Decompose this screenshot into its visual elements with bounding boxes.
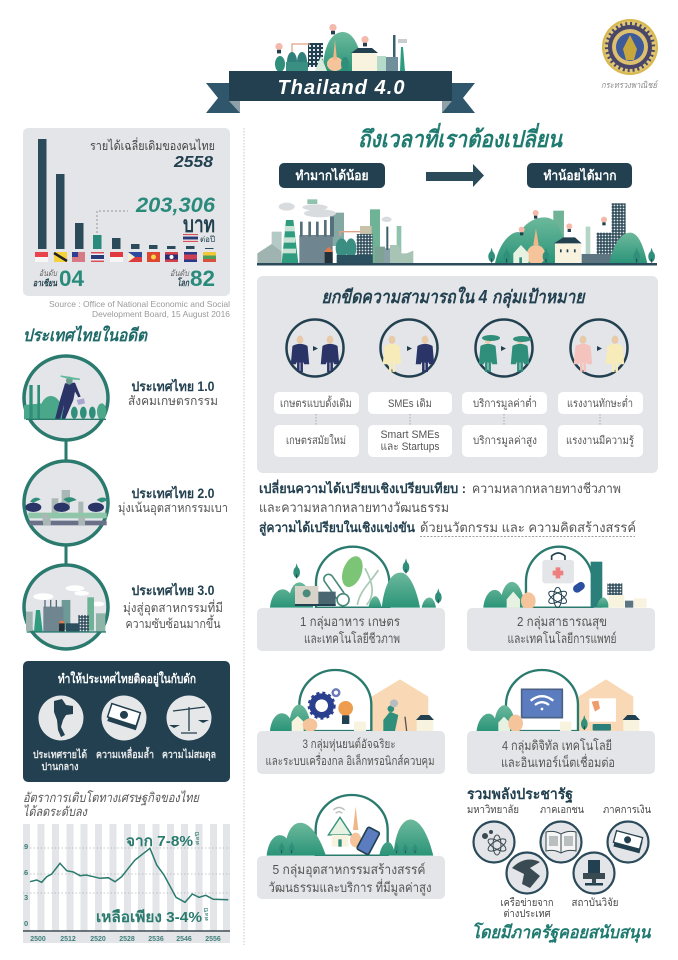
icon: private sector book — [540, 822, 582, 862]
header city illustration — [275, 24, 407, 72]
card 2 label: 2 กลุ่มสาธารณสุข — [517, 614, 607, 630]
card 5 label: 5 กลุ่มอุตสาหกรรมสร้างสรรค์ — [272, 862, 426, 878]
box: low skill labour: แรงงานทักษะต่ำ — [567, 395, 633, 410]
callout: 3-4 percent: เหลือเพียง 3-4% — [96, 909, 202, 926]
card 2 label: และเทคโนโลยีการแพทย์ — [508, 631, 616, 646]
chart heading: อัตราการเติบโตทางเศรษฐกิจของไทย — [23, 790, 200, 806]
card 5 label: วัฒนธรรมและบริการ ที่มีมูลค่าสูง — [268, 879, 432, 896]
source note: Source : Office of National Economic and Social — [49, 299, 230, 309]
label: middle income — [33, 748, 87, 773]
main heading: ถึงเวลาที่เราต้องเปลี่ยน — [358, 122, 563, 152]
box: high value services: บริการมูลค่าสูง — [473, 435, 537, 447]
card 2 illustration: health — [483, 547, 647, 610]
x axis labels: 2500 — [30, 936, 46, 943]
text: Thailand 2.0 — [118, 485, 228, 516]
world rank — [170, 266, 215, 291]
text: Thailand 1.0 — [128, 378, 218, 408]
icon: international network globe — [506, 852, 548, 894]
text: Thailand 3.0: มุ่งสู่อุตสาหกรรมที่มี — [123, 599, 223, 616]
ASEAN rank — [33, 266, 85, 291]
card 3 label — [257, 731, 445, 774]
card 4 illustration: digital — [477, 670, 640, 732]
text: comparative advantage: ความหลากหลายทางชีวภาพ — [472, 481, 621, 496]
box: modern farming — [274, 425, 359, 457]
label: inequality: ความเหลื่อมล้ำ — [96, 746, 154, 761]
unit baht: บาท — [183, 212, 215, 237]
icon: farmers — [286, 320, 344, 376]
text: Thailand 3.0: ประเทศไทย 3.0 — [132, 582, 214, 598]
card 4 label: 4 กลุ่มดิจิทัล เทคโนโลยี — [502, 738, 612, 754]
ministry seal — [601, 19, 659, 90]
labels: partners: มหาวิทยาลัย — [467, 804, 519, 816]
box: traditional SMEs: SMEs เดิม — [388, 398, 432, 410]
label: middle income: ปานกลาง — [42, 761, 78, 773]
button: do less get more: ทำน้อยได้มาก — [544, 167, 617, 183]
growth line — [30, 848, 228, 902]
ministry seal: กระทรวงพาณิชย์ — [601, 80, 659, 90]
card 3 label: 3 กลุ่มหุ่นยนต์อัจฉริยะ — [302, 737, 396, 752]
card 1 label — [257, 608, 445, 651]
box: smart SMEs: และ Startups — [380, 441, 440, 453]
button: do less get more — [527, 163, 632, 188]
panel heading: ยกขีดความสามารถใน 4 กลุ่มเป้าหมาย — [322, 286, 586, 309]
labels: partners — [467, 804, 651, 920]
chart heading — [23, 790, 200, 819]
card 4 label: และอินเทอร์เน็ตเชื่อมต่อ — [501, 753, 615, 770]
callout: 3-4 percent: ต่อปี — [203, 908, 210, 921]
icon: finance money — [608, 822, 648, 862]
text: comparative advantage: และความหลากหลายทางวัฒนธรรม — [259, 500, 449, 515]
x axis labels: 2528 — [119, 936, 135, 943]
text: Thailand 3.0 — [123, 582, 223, 631]
text: comparative advantage: เปลี่ยนความได้เปรียบเชิงเปรียบเทียบ : — [259, 479, 466, 496]
heading: civil state power: รวมพลังประชารัฐ — [467, 787, 573, 804]
world rank: 82 — [190, 266, 215, 291]
ASEAN rank: อาเซียน — [33, 278, 58, 288]
panel heading: ทำให้ประเทศไทยติดอยู่ในกับดัก — [58, 671, 196, 687]
box: traditional farming: เกษตรแบบดั้งเดิม — [280, 395, 352, 410]
ground lines — [257, 263, 657, 266]
heading: average income: รายได้เฉลี่ยเดิมของคนไทย — [90, 137, 215, 153]
button: do more get less: ทำมากได้น้อย — [296, 167, 368, 183]
panel: middle income trap — [23, 661, 230, 782]
labels: partners: สถาบันวิจัย — [572, 897, 618, 909]
panel: income — [23, 128, 230, 296]
labels: partners: เครือข่ายจาก — [500, 896, 554, 909]
illustration: new innovative city — [488, 203, 655, 265]
icon: SMEs — [380, 320, 438, 376]
thai flag and per year — [183, 234, 215, 244]
panel: four target groups — [257, 276, 658, 473]
arrow — [426, 164, 484, 187]
box: smart SMEs: Smart SMEs — [380, 429, 440, 441]
y axis labels — [24, 842, 28, 928]
ASEAN rank: 04 — [59, 266, 85, 291]
thai flag and per year: ต่อปี — [200, 235, 215, 244]
text: comparative advantage: ด้วยนวัตกรรม และ ความคิดสร้างสรรค์ — [420, 520, 636, 535]
income value: 203,306 — [135, 194, 215, 217]
callout: 7-8 percent: จาก 7-8% — [126, 833, 193, 850]
circle: Thailand 3.0 complex industry — [24, 565, 108, 649]
ASEAN rank: อันดับ — [39, 268, 57, 278]
box: high value services — [462, 425, 547, 457]
line chart: GDP growth — [23, 824, 230, 943]
callout: 7-8 percent: ต่อปี — [194, 832, 201, 845]
box: knowledge labour — [558, 425, 643, 457]
source note — [49, 299, 230, 319]
x axis labels — [30, 936, 221, 943]
box: modern farming: เกษตรสมัยใหม่ — [286, 434, 346, 447]
text: Thailand 1.0: ประเทศไทย 1.0 — [132, 378, 214, 394]
world rank: อันดับ — [170, 268, 190, 278]
y axis labels: 0 — [24, 919, 28, 928]
text: Thailand 2.0: มุ่งเน้นอุตสาหกรรมเบา — [118, 501, 228, 516]
box: low value services: บริการมูลค่าต่ำ — [473, 395, 537, 410]
x axis labels: 2520 — [90, 936, 106, 943]
title banner — [206, 71, 475, 113]
card 5 label — [257, 856, 445, 899]
box: smart SMEs — [368, 425, 452, 457]
icon: workers — [570, 320, 628, 376]
x axis labels: 2512 — [60, 936, 76, 943]
card 5 illustration: creative — [267, 795, 433, 856]
illustration: old industry city — [257, 199, 413, 264]
icon: research microscope — [574, 852, 614, 894]
card 3 label: และระบบเครื่องกล อิเล็กทรอนิกส์ควบคุม — [266, 752, 434, 769]
timeline connectors — [64, 440, 68, 566]
text: Thailand 1.0: สังคมเกษตรกรรม — [128, 394, 218, 408]
icon: Thailand map — [38, 696, 84, 740]
icon: university — [474, 822, 514, 862]
button: do more get less — [279, 163, 385, 188]
card 1 label: 1 กลุ่มอาหาร เกษตร — [300, 614, 400, 630]
icon: scales — [166, 696, 212, 740]
bar chart: ASEAN income — [38, 139, 214, 249]
heading: Thailand past: ประเทศไทยในอดีต — [23, 325, 148, 345]
text: Thailand 2.0: ประเทศไทย 2.0 — [132, 485, 214, 501]
y axis labels: 6 — [24, 868, 28, 877]
box: low value services — [462, 392, 547, 414]
world rank: โลก — [177, 277, 190, 289]
text: comparative advantage — [259, 479, 636, 536]
labels: partners: ภาคการเงิน — [603, 804, 651, 816]
card 3 illustration: robotics — [270, 670, 434, 732]
x axis labels: 2556 — [205, 936, 221, 943]
labels: partners: ภาคเอกชน — [540, 804, 584, 816]
closing statement: โดยมีภาครัฐคอยสนับสนุน — [472, 922, 652, 944]
label: middle income: ประเทศรายได้ — [33, 748, 87, 761]
y axis labels: 3 — [24, 893, 28, 902]
card 1 illustration: food agriculture — [270, 547, 442, 608]
x axis labels: 2536 — [148, 936, 164, 943]
y axis labels: 9 — [24, 842, 28, 851]
box: knowledge labour: แรงงานมีความรู้ — [566, 434, 634, 447]
year: 2558 — [173, 154, 213, 171]
vertical dotted divider — [243, 128, 245, 945]
label: imbalance: ความไม่สมดุล — [162, 748, 216, 762]
box: low skill labour — [558, 392, 643, 414]
chart heading: ได้ลดระดับลง — [23, 804, 88, 819]
circle: Thailand 1.0 farming — [24, 356, 108, 440]
x axis labels: 2546 — [176, 936, 192, 943]
box: traditional SMEs — [368, 392, 452, 414]
source note: Development Board, 15 August 2016 — [92, 309, 230, 319]
card 2 label — [467, 608, 655, 651]
card 4 label — [467, 731, 655, 774]
icon: services — [476, 320, 532, 376]
text: Thailand 3.0: ความซับซ้อนมากขึ้น — [126, 614, 221, 631]
card 1 label: และเทคโนโลยีชีวภาพ — [304, 631, 400, 646]
icon: money — [102, 696, 146, 740]
text: comparative advantage: สู่ความได้เปรียบในเชิงแข่งขัน — [259, 519, 415, 536]
circle: Thailand 2.0 light industry — [24, 461, 108, 545]
labels: partners: ต่างประเทศ — [504, 908, 551, 920]
flags row — [35, 252, 216, 262]
box: traditional farming — [274, 392, 359, 414]
title banner: Thailand 4.0 — [278, 77, 404, 99]
